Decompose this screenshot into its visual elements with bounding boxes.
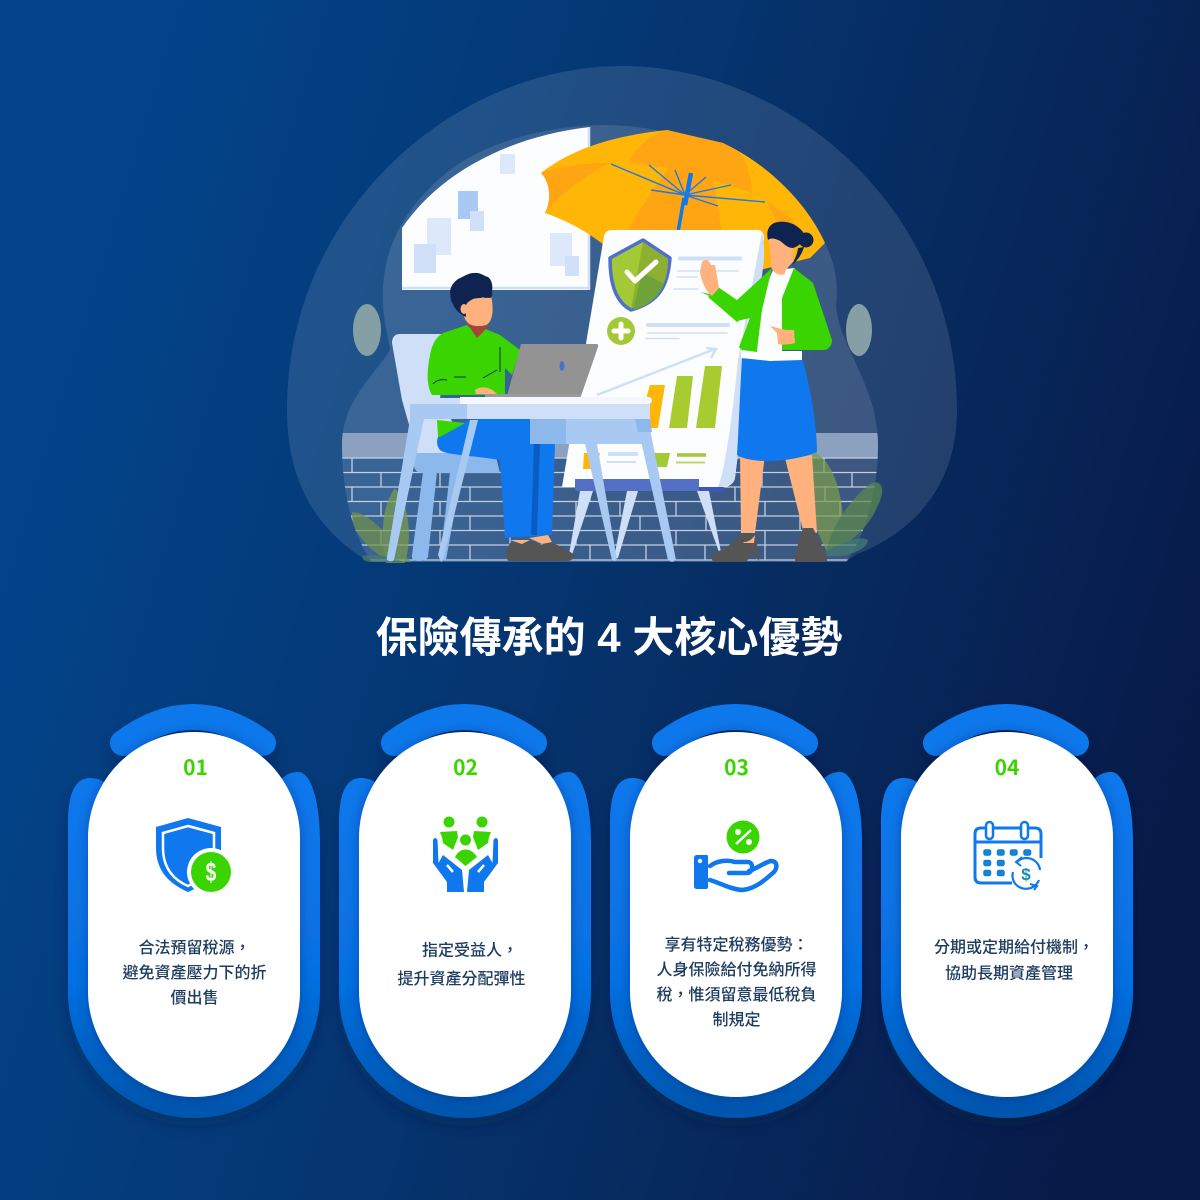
card 4 icon: calendar with dollar — [975, 822, 1042, 890]
document lines — [646, 258, 740, 338]
torso — [428, 325, 520, 395]
card 3 text: 制規定 — [712, 1006, 761, 1030]
shoes — [712, 533, 759, 562]
card 2 text — [397, 936, 526, 989]
umbrella — [541, 130, 825, 270]
card 4 — [881, 717, 1133, 1118]
board stand — [575, 479, 699, 491]
legs — [740, 455, 765, 533]
card 1 icon: shield with dollar — [156, 818, 235, 896]
desk legs — [387, 419, 424, 561]
card 1 text: 合法預留稅源， — [138, 934, 251, 958]
plants — [352, 452, 882, 563]
card 2 frame — [339, 717, 591, 1118]
woman — [700, 222, 832, 562]
card 3 text: 人身保險給付免納所得 — [656, 956, 817, 980]
card 4 number: 04 — [995, 752, 1019, 782]
neck — [466, 322, 489, 338]
white top — [742, 268, 795, 353]
plus badge — [607, 317, 635, 345]
card 2 text: 指定受益人， — [422, 936, 518, 960]
shoes — [506, 540, 575, 561]
card 1 frame — [68, 717, 320, 1118]
card 1 text: 避免資產壓力下的折 — [122, 959, 267, 983]
brick wall — [340, 433, 880, 560]
illustration: insurance planning scene — [287, 66, 957, 563]
hands — [700, 260, 719, 296]
card 2 number: 02 — [453, 752, 478, 782]
card 4 frame — [881, 717, 1133, 1118]
man — [428, 273, 575, 561]
card 3 text: 稅，惟須留意最低稅負 — [656, 981, 817, 1005]
card 3 text: 享有特定稅務優勢： — [664, 931, 809, 955]
legs — [437, 419, 555, 538]
card 3 number: 03 — [724, 752, 749, 782]
chair — [392, 334, 500, 561]
card 4 icon: calendar with dollar: $ — [1021, 865, 1031, 884]
card 1 text: 價出售 — [170, 984, 219, 1008]
window — [402, 127, 590, 290]
card 4 text: 分期或定期給付機制， — [934, 934, 1094, 958]
desk — [387, 397, 676, 562]
desk back and chair — [387, 273, 676, 562]
card 3 icon: hand with percent — [694, 820, 776, 890]
head — [768, 236, 793, 275]
side ovals — [353, 304, 381, 356]
shield check icon — [610, 240, 670, 310]
card 2 — [339, 717, 591, 1118]
title: 保險傳承的 4 大核心優勢 — [376, 614, 842, 661]
card 2 icon: hands holding family — [433, 816, 498, 892]
bar chart — [583, 366, 722, 469]
card 4 text — [934, 934, 1094, 984]
card 3 — [610, 717, 862, 1118]
card 1 text — [122, 934, 267, 1008]
cardigan — [742, 268, 772, 350]
card 1 icon: shield with dollar: $ — [206, 857, 216, 887]
inner blob — [342, 125, 878, 562]
card 1 number: 01 — [183, 752, 208, 782]
trend arrow — [597, 348, 716, 395]
card 4 text: 協助長期資產管理 — [945, 960, 1073, 984]
card 1 — [68, 717, 320, 1118]
card 3 text — [656, 931, 817, 1030]
skirt — [737, 358, 817, 461]
head — [464, 296, 493, 326]
presentation board — [562, 230, 764, 560]
laptop — [507, 344, 598, 396]
card 3 frame — [610, 717, 862, 1118]
card 2 text: 提升資產分配彈性 — [397, 965, 526, 989]
outer blob — [287, 66, 957, 562]
hair — [450, 273, 492, 317]
